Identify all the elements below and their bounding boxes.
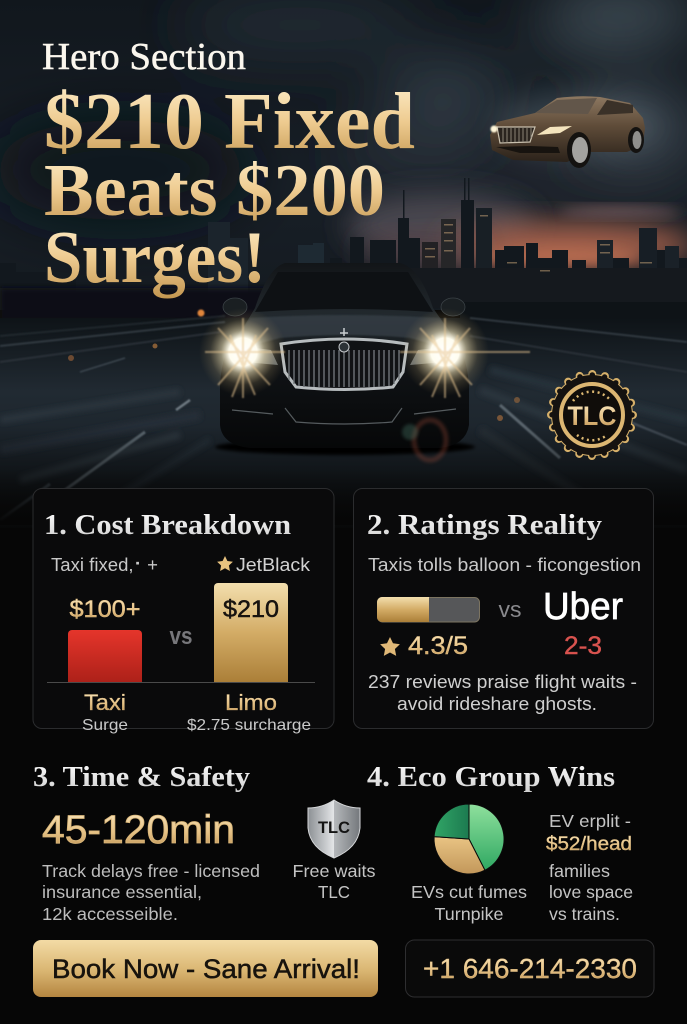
city lights [425, 215, 652, 272]
TLC seal badge [551, 374, 633, 456]
review text: avoid rideshare ghosts. [397, 694, 597, 714]
split price note: families [549, 861, 610, 881]
taxi label [82, 690, 128, 734]
windows [535, 98, 597, 114]
pie caption: EVs cut fumes [411, 882, 527, 902]
review text: 237 reviews praise flight waits - [368, 672, 637, 692]
hero label: Hero Section [42, 36, 246, 78]
vs label: vs [170, 623, 192, 650]
shield caption: Free waits [292, 861, 376, 881]
split price note: vs trains. [549, 904, 620, 924]
description [42, 861, 260, 924]
mirrors [223, 298, 247, 316]
pie chart [434, 804, 504, 874]
limo score: 4.3/5 [408, 632, 468, 660]
small brown sedan [490, 91, 655, 168]
wheels [567, 132, 591, 168]
button: book now: Book Now - Sane Arrival! [52, 954, 360, 984]
sublabel jetblack: JetBlack [236, 555, 311, 575]
badge text: TLC [568, 401, 616, 431]
split price note [546, 811, 633, 924]
shield caption: TLC [318, 882, 350, 902]
hero background scene [0, 0, 687, 528]
bar: taxi [68, 596, 142, 682]
bar: limo: $210 [223, 596, 279, 623]
windshield [255, 272, 433, 312]
section: eco group wins [367, 761, 633, 924]
split price note: $52/head [546, 834, 632, 855]
vs label: vs [498, 597, 522, 622]
limo score [380, 632, 468, 660]
button: book now [33, 940, 378, 997]
limo label [187, 690, 311, 734]
uber wordmark: Uber [543, 586, 623, 628]
bar: limo [214, 583, 288, 682]
road streaks [0, 370, 687, 520]
storm clouds [0, 0, 687, 220]
description: 12k accesseible. [42, 904, 178, 924]
grille [281, 339, 407, 390]
time stat: 45-120min [42, 808, 235, 852]
grille [497, 127, 535, 143]
panel: ratings reality [354, 488, 654, 728]
bumper trim [232, 408, 456, 424]
lamp [537, 126, 572, 135]
button: phone number: +1 646-214-2330 [423, 953, 637, 984]
taxi label: Surge [82, 717, 128, 734]
description: Track delays free - licensed [42, 861, 260, 881]
review text [368, 672, 637, 714]
limo label: Limo [225, 690, 277, 715]
main headline: Surges! [44, 217, 266, 299]
main headline [44, 78, 415, 299]
dark treeline [0, 288, 300, 320]
guard rails [0, 316, 687, 372]
split price note: EV erplit - [549, 811, 631, 831]
split price note: love space [549, 882, 633, 902]
sunset glow [360, 207, 687, 267]
car body [220, 263, 469, 448]
main headline: $210 Fixed [44, 78, 415, 166]
road surface [0, 318, 687, 528]
heading: 3. Time & Safety [33, 761, 251, 793]
dusk haze behind towers [345, 193, 535, 257]
main headline: Beats $200 [44, 150, 385, 232]
subtitle: Taxis tolls balloon - ficongestion [368, 555, 641, 575]
rating bar [377, 597, 480, 622]
black limousine [0, 263, 530, 460]
shield caption [292, 861, 376, 902]
skyline [0, 178, 687, 310]
icon: TLC shield: TLC [318, 818, 350, 837]
hood highlight [226, 315, 462, 352]
taxi label: Taxi [84, 690, 126, 715]
heading: 2. Ratings Reality [367, 509, 603, 541]
bokeh lights [68, 310, 520, 421]
heading: 1. Cost Breakdown [44, 509, 291, 541]
emblem [339, 342, 349, 352]
panel: cost breakdown [33, 488, 334, 734]
uber score: 2-3 [564, 632, 602, 660]
limo label: $2.75 surcharge [187, 717, 311, 734]
sublabel taxi: Taxi fixed,⠂+ [51, 555, 158, 575]
icon: TLC shield [308, 800, 360, 858]
bar: taxi: $100+ [70, 596, 140, 623]
description: insurance essential, [42, 882, 202, 902]
section: time and safety [33, 761, 376, 924]
pie caption: Turnpike [434, 904, 504, 924]
lower valance [496, 146, 560, 153]
flares [199, 308, 287, 396]
heading: 4. Eco Group Wins [367, 761, 615, 793]
lamp housings [245, 348, 278, 365]
pie caption [411, 882, 527, 924]
button: phone number [406, 940, 654, 997]
lane markings [0, 358, 687, 520]
bottom fade [0, 425, 687, 525]
